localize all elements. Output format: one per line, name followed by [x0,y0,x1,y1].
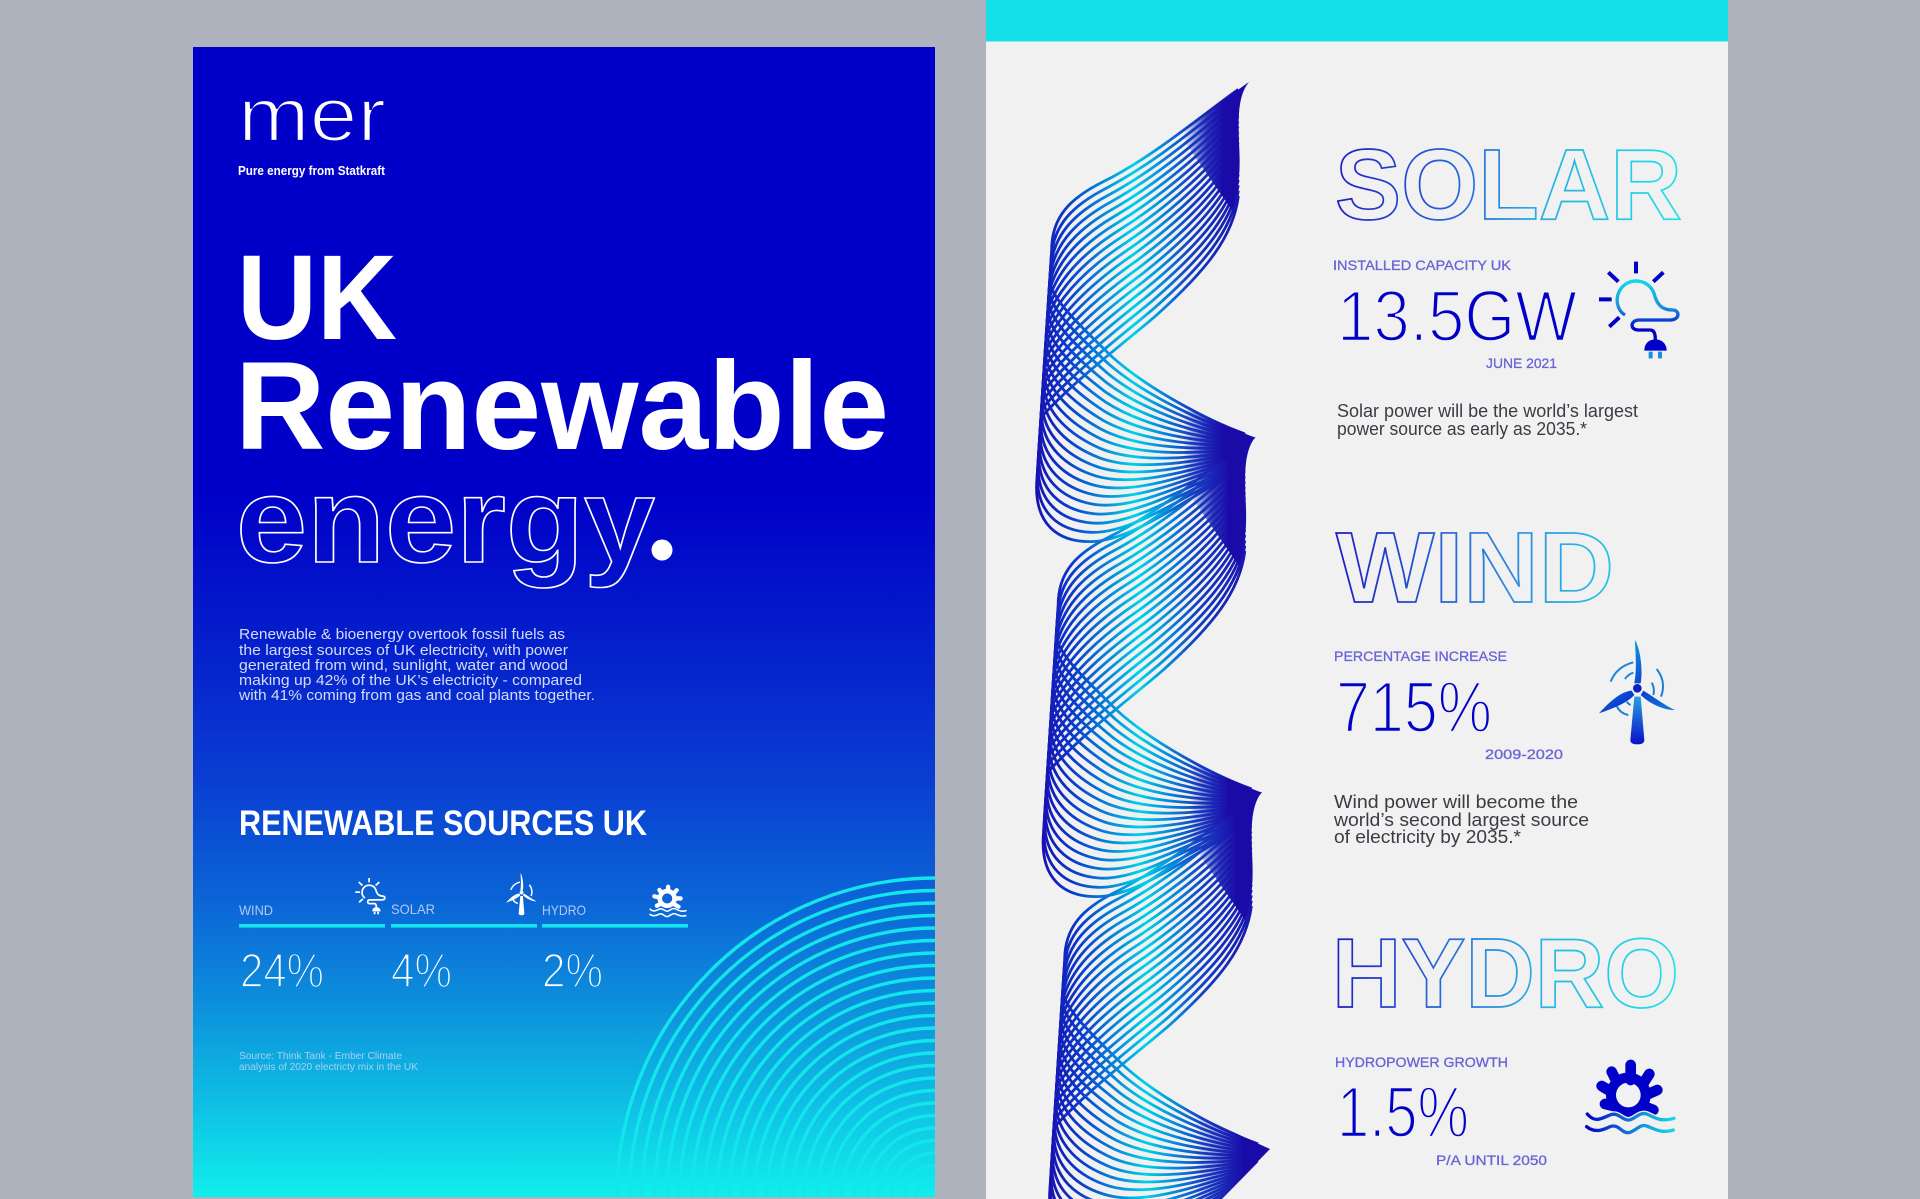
intro paragraph: with 41% coming from gas and coal plants together. [238,687,595,704]
stat: hydro 2% [542,902,688,998]
title [235,229,889,588]
panel background gradient [193,47,935,1197]
section: hydro: HYDRO [1332,918,1679,1028]
panel background [986,0,1728,1199]
source note: analysis of 2020 electricty mix in the UK [239,1061,418,1073]
section: solar: INSTALLED CAPACITY UK [1333,258,1511,273]
title: energy. [236,452,681,588]
section: hydro: 1.5% [1337,1073,1469,1153]
section: wind: PERCENTAGE INCREASE [1334,649,1507,664]
icon: small wind turbine [506,873,537,915]
section: solar [1333,129,1682,439]
section: wind [1333,512,1675,847]
intro paragraph [238,626,595,704]
title: UK [237,229,397,365]
source note [239,1050,418,1073]
title: Renewable [235,337,889,476]
stat: hydro 2%: HYDRO [542,902,586,918]
section: solar: 13.5GW [1337,277,1577,357]
section: solar: power source as early as 2035.* [1337,418,1587,439]
section: wind: 715% [1336,668,1492,748]
icon: small sun with plug [355,878,385,914]
intro paragraph: generated from wind, sunlight, water and wood [239,657,568,674]
section: wind: Wind power will become the [1334,791,1578,812]
stat: wind 24%: 24% [240,945,324,998]
panel: poster cover [193,47,935,1197]
intro paragraph: Renewable & bioenergy overtook fossil fuels as [239,626,565,643]
section: wind: WIND [1336,512,1614,624]
icon: small hydro wheel [649,887,687,917]
icon: hydro wheel [1587,1065,1674,1133]
stat: wind 24% [239,902,385,998]
stat: solar 4%: 4% [391,945,452,998]
section: hydro [1332,918,1679,1168]
stat: hydro 2%: 2% [542,945,603,998]
stat: solar 4%: SOLAR [391,901,435,917]
stat: wind 24%: WIND [239,902,273,918]
section: hydro: HYDROPOWER GROWTH [1335,1055,1508,1070]
intro paragraph: making up 42% of the UK’s electricity - compared [239,672,582,689]
panel: energy sources [986,0,1728,1199]
tagline: Pure energy from Statkraft [238,163,386,178]
stat: solar 4% [391,901,537,998]
concentric arcs [617,878,935,1196]
heading: renewable sources: RENEWABLE SOURCES UK [239,804,647,843]
cyan top band [986,0,1728,42]
icon: sun with plug [1599,262,1678,358]
section: wind: 2009-2020 [1485,747,1563,762]
intro paragraph: the largest sources of UK electricity, with power [239,642,568,659]
section: solar: SOLAR [1335,129,1682,241]
logo: mer: mer [238,73,386,158]
section: solar: JUNE 2021 [1486,356,1557,371]
section: wind: world’s second largest source [1333,809,1589,830]
icon: wind turbine [1599,640,1675,744]
section: wind: of electricity by 2035.* [1334,826,1521,847]
section: hydro: P/A UNTIL 2050 [1436,1153,1547,1168]
source note: Source: Think Tank - Ember Climate [239,1050,402,1062]
twisted line ribbon [1035,82,1270,1199]
section: solar: Solar power will be the world’s largest [1337,400,1638,421]
